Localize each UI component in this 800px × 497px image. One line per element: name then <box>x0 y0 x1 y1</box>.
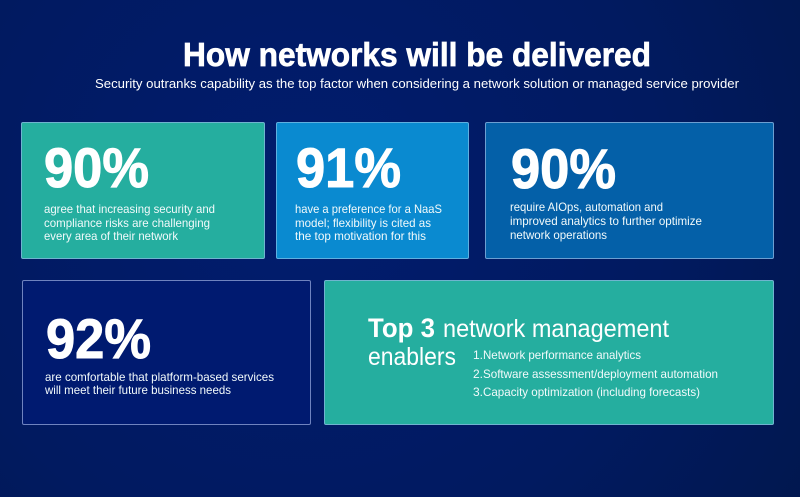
stat: 90% AIOps: 90% <box>511 137 616 200</box>
text: NaaS description: model; flexibility is cited as <box>295 216 431 230</box>
numbered list: enablers: 3. <box>473 385 483 399</box>
heading: top 3 network management enablers: Top 3 <box>368 313 435 343</box>
text: AIOps description: require AIOps, automation and <box>510 200 663 214</box>
title: How networks will be delivered <box>183 36 651 73</box>
text: AIOps description: improved analytics to further optimize <box>510 214 702 228</box>
text: platform description: will meet their future business needs <box>44 383 231 397</box>
panel: AIOps stat <box>486 122 774 258</box>
text: security description: compliance risks are challenging <box>44 216 210 230</box>
heading: top 3 network management enablers <box>368 313 669 371</box>
heading: top 3 network management enablers: enablers <box>368 343 456 371</box>
stat: 92% platform: 92% <box>46 307 151 370</box>
numbered list: enablers: Software assessment/deployment automation <box>483 367 718 381</box>
stat: 90% security: 90% <box>44 136 149 199</box>
text: NaaS description: the top motivation for this <box>295 229 426 243</box>
subtitle: Security outranks capability as the top factor when considering a network solution or managed service provider <box>95 76 740 91</box>
stat: 91% NaaS: 91% <box>296 136 401 199</box>
numbered list: enablers: 2. <box>473 367 483 381</box>
text: AIOps description <box>510 200 702 242</box>
numbered list: enablers: Capacity optimization (including forecasts) <box>483 385 700 399</box>
text: platform description: are comfortable that platform-based services <box>45 370 274 384</box>
text: security description <box>44 202 215 243</box>
text: platform description <box>44 370 274 397</box>
text: security description: every area of their network <box>44 229 179 243</box>
text: AIOps description: network operations <box>510 228 607 242</box>
text: security description: agree that increasing security and <box>44 202 215 216</box>
numbered list: enablers: Network performance analytics <box>483 348 641 362</box>
heading: top 3 network management enablers: network management <box>443 315 669 343</box>
numbered list: enablers <box>473 348 718 399</box>
text: NaaS description <box>295 202 442 243</box>
panel: NaaS preference stat <box>276 122 468 258</box>
panel: security and compliance stat <box>22 122 264 258</box>
text: NaaS description: have a preference for a NaaS <box>295 202 442 216</box>
panel: top 3 enablers <box>324 280 774 424</box>
panel: platform-based services stat <box>22 280 310 424</box>
numbered list: enablers: 1. <box>473 348 483 362</box>
